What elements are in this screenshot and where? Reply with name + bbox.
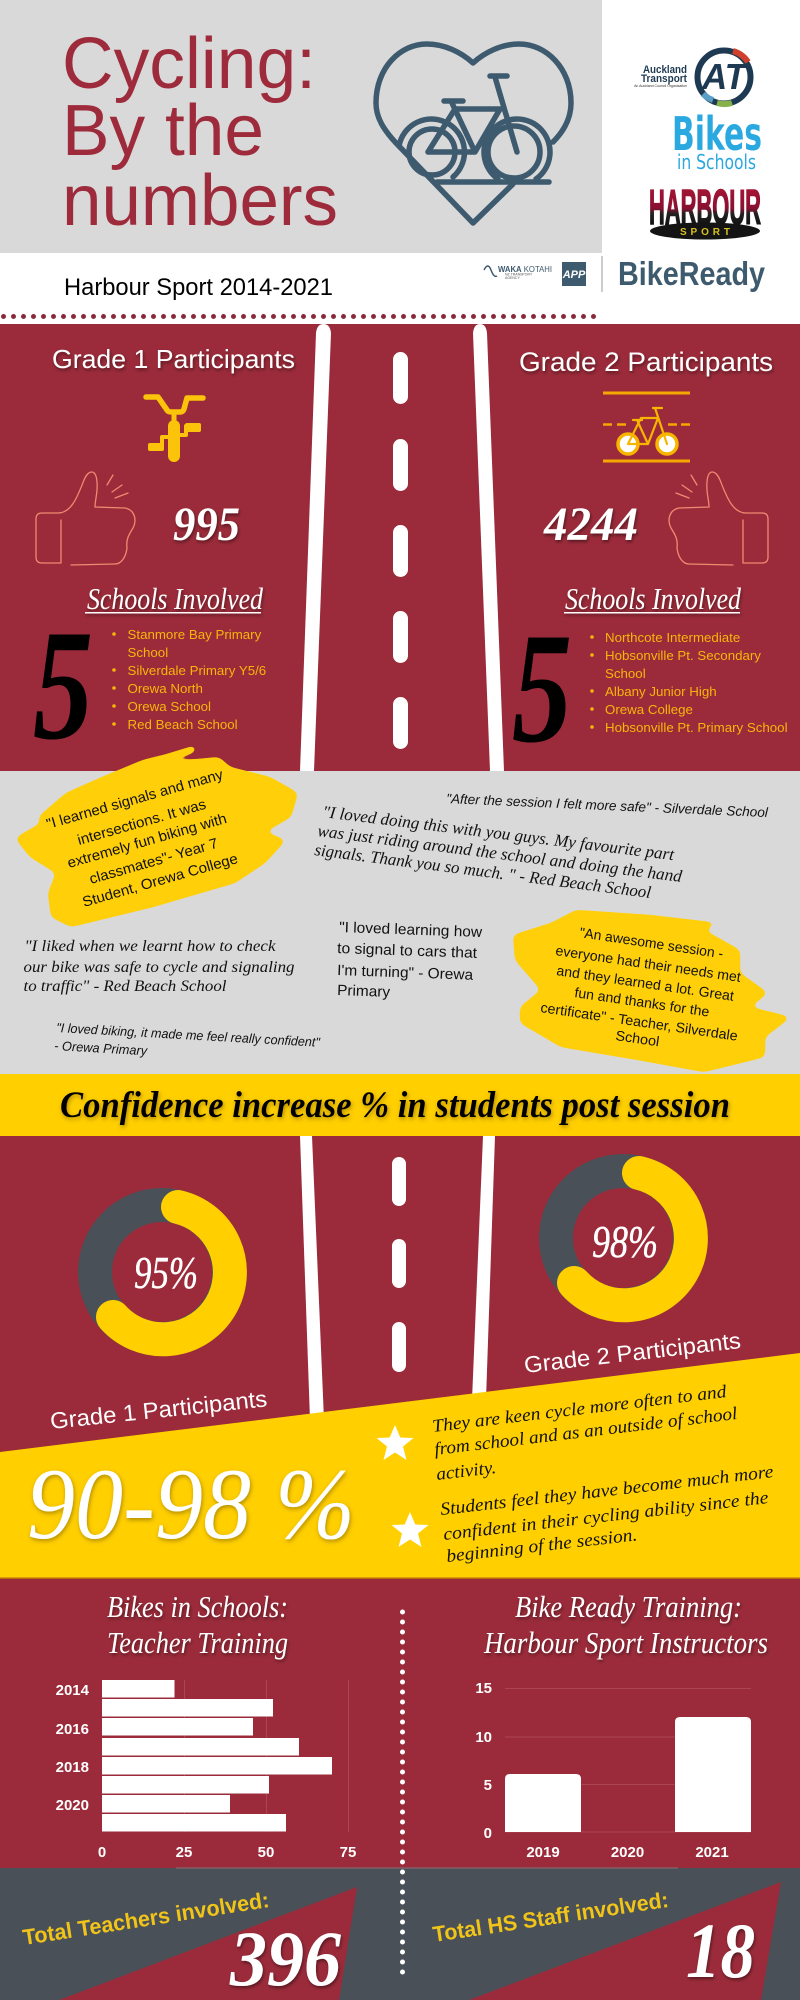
label: total staff: Total HS Staff involved: xyxy=(431,1887,670,1947)
logo: Waka Kotahi xyxy=(484,262,586,286)
quote: teacher silverdale: everyone had their needs met xyxy=(555,942,742,985)
label: 98%: 98% xyxy=(592,1217,658,1267)
bar chart: staff by year: 0 xyxy=(484,1825,492,1842)
logo: Harbour Sport: SPORT xyxy=(680,227,730,238)
panel: participants road xyxy=(0,324,800,776)
quote: teacher silverdale: "An awesome session - xyxy=(579,924,725,961)
slanted yellow band xyxy=(0,1353,800,1580)
quote: year 7 student xyxy=(45,767,240,911)
list: grade 2 schools: Hobsonville Pt. Secondary xyxy=(605,648,761,663)
quote: orewa signal xyxy=(337,919,483,1001)
number: grade 2 participants: 4244 xyxy=(543,498,638,551)
quote: teacher silverdale: fun and thanks for the xyxy=(574,984,711,1020)
bar chart: teachers by year: 2016 xyxy=(56,1721,89,1738)
logo: BikeReady: BikeReady xyxy=(618,255,766,292)
title xyxy=(62,24,338,241)
panel: confidence banner xyxy=(0,1074,800,1136)
panel: header xyxy=(0,0,800,324)
heading: teacher training: Teacher Training xyxy=(107,1625,288,1660)
title: By the xyxy=(62,91,264,171)
brush: left quote xyxy=(15,745,298,927)
list: grade 1 schools: Orewa School xyxy=(128,699,211,714)
number: 396: 396 xyxy=(229,1915,341,2000)
logo: Auckland Transport xyxy=(634,50,750,104)
logo: Waka Kotahi: AGENCY xyxy=(505,276,520,280)
donut: grade 1 95% xyxy=(95,1205,230,1339)
quote: red beach hand signals: was just riding around the school and doing the hand xyxy=(316,821,683,886)
quote: silverdale safe: "After the session I felt more safe" - Silverdale School xyxy=(446,791,769,820)
heading: teacher training: Bikes in Schools: xyxy=(107,1589,288,1624)
quote: orewa signal: I'm turning" - Orewa xyxy=(337,962,474,984)
heading: confidence: Confidence increase % in students post session xyxy=(60,1085,730,1126)
logo: Auckland Transport: Transport xyxy=(641,73,687,85)
logo: Auckland Transport: An Auckland Council Organisation xyxy=(634,84,687,88)
heading: schools involved right: Schools Involved xyxy=(565,581,741,616)
panel: training charts xyxy=(0,1579,800,1868)
text: feel confident: Students feel they have become much more xyxy=(439,1461,774,1519)
list: grade 2 schools: School xyxy=(605,666,646,681)
label: 95%: 95% xyxy=(134,1248,198,1298)
quote: orewa signal: Primary xyxy=(337,982,391,1001)
bar chart: teachers by year: 25 xyxy=(176,1844,192,1861)
quote: year 7 student: Student, Orewa College xyxy=(81,851,240,911)
road edge lines xyxy=(300,1136,495,1420)
heading: grade 2: Grade 2 Participants xyxy=(519,347,773,377)
text: keen cycle: activity. xyxy=(435,1457,497,1484)
bar chart: staff by year: 2019 xyxy=(526,1844,560,1861)
icon: bicycle on lane xyxy=(603,392,690,462)
triangle: staff xyxy=(469,1882,781,2000)
list: grade 2 schools xyxy=(590,630,788,735)
list: grade 2 schools: Albany Junior High xyxy=(605,684,717,699)
label: grade 2 participants: Grade 2 Participants xyxy=(523,1327,742,1378)
list: grade 1 schools xyxy=(112,627,266,732)
list: grade 1 schools: Silverdale Primary Y5/6 xyxy=(128,663,266,678)
quote: red beach bike check: "I liked when we learnt how to check xyxy=(24,938,276,955)
number: 90-98%: 90-98 % xyxy=(27,1448,355,1561)
bar chart: teachers by year: 50 xyxy=(258,1844,274,1861)
logo: Bikes in Schools xyxy=(672,107,762,174)
logo: Auckland Transport: Auckland xyxy=(643,64,687,76)
panel: totals xyxy=(0,1868,800,2000)
quote: orewa confident: "I loved biking, it made me feel really confident" xyxy=(56,1020,322,1050)
text: keen cycle xyxy=(431,1381,738,1484)
logo: Waka Kotahi: WAKA KOTAHI xyxy=(498,265,552,274)
quote: red beach hand signals: "I loved doing this with you guys. My favourite part xyxy=(322,802,676,864)
list: grade 1 schools: School xyxy=(128,645,168,660)
icon: thumbs up left xyxy=(36,472,135,565)
road edge lines xyxy=(300,324,504,771)
title: Cycling: xyxy=(62,24,316,104)
road centre dashes xyxy=(392,1157,406,1372)
icon: heart with bicycle xyxy=(376,44,571,223)
quote: year 7 student: intersections. It was xyxy=(76,797,208,849)
icon: thumbs up right xyxy=(669,472,768,565)
quote: year 7 student: extremely fun biking with xyxy=(66,811,229,872)
quote: red beach hand signals: signals. Thank you so much. " - Red Beach School xyxy=(313,840,652,902)
text: feel confident: confident in their cycling ability since the xyxy=(442,1487,769,1544)
bar chart: staff by year: 10 xyxy=(475,1729,492,1746)
text: feel confident: beginning of the session. xyxy=(445,1524,638,1566)
number: five schools left: 5 xyxy=(33,598,93,773)
quote: red beach hand signals xyxy=(313,802,683,902)
number: grade 1 participants: 995 xyxy=(173,498,240,551)
bar chart: staff by year: 15 xyxy=(475,1680,492,1697)
quote: year 7 student: "I learned signals and many xyxy=(45,767,226,833)
quote: teacher silverdale xyxy=(540,924,742,1049)
icon: star 1 xyxy=(376,1425,414,1460)
title: numbers xyxy=(62,161,338,241)
bar chart: teachers by year: 75 xyxy=(340,1844,356,1861)
bar chart: teachers by year: 2020 xyxy=(56,1797,89,1814)
quote: year 7 student: classmates"- Year 7 xyxy=(88,836,220,888)
logo: Waka Kotahi: NZ TRANSPORT xyxy=(505,272,533,276)
list: grade 1 schools: Orewa North xyxy=(128,681,203,696)
panel: confidence results xyxy=(0,1136,800,1580)
list: grade 2 schools: Hobsonville Pt. Primary School xyxy=(605,720,788,735)
quote: red beach bike check: our bike was safe to cycle and signaling xyxy=(24,959,294,976)
bar chart: staff by year: 5 xyxy=(484,1777,492,1794)
quote: orewa confident: - Orewa Primary xyxy=(54,1038,149,1058)
subtitle: Harbour Sport 2014-2021 xyxy=(64,274,333,301)
heading: instructors xyxy=(483,1589,768,1660)
panel: quotes xyxy=(0,745,800,1074)
number: 18: 18 xyxy=(686,1907,755,1994)
number: five schools right: 5 xyxy=(512,601,572,776)
quote: teacher silverdale: School xyxy=(615,1027,660,1049)
logo: Waka Kotahi: APP xyxy=(562,269,586,281)
heading: schools involved left: Schools Involved xyxy=(87,581,263,616)
quote: red beach bike check xyxy=(24,938,294,995)
logo: Bikes in Schools: in Schools xyxy=(677,150,756,174)
bar chart: staff by year xyxy=(475,1680,751,1861)
icon: star 2 xyxy=(392,1512,428,1547)
heading: teacher training xyxy=(107,1589,288,1660)
bar chart: teachers by year: 0 xyxy=(98,1844,106,1861)
bar chart: teachers by year: 2018 xyxy=(56,1759,89,1776)
label: grade 1 participants: Grade 1 Participants xyxy=(49,1385,268,1434)
text: keen cycle: They are keen cycle more often to and xyxy=(431,1381,728,1436)
bar chart: teachers by year xyxy=(56,1680,356,1861)
text: feel confident xyxy=(439,1461,774,1566)
bar chart: staff by year: 2021 xyxy=(695,1844,729,1861)
heading: grade 1: Grade 1 Participants xyxy=(52,344,295,374)
donut: grade 2 98% xyxy=(556,1171,691,1305)
logo: Harbour Sport xyxy=(649,181,761,240)
brush: right quote xyxy=(513,910,791,1072)
triangle: teachers xyxy=(59,1887,357,2000)
label: total teachers: Total Teachers involved: xyxy=(21,1887,271,1950)
logo: Auckland Transport: AT xyxy=(701,56,749,97)
bar chart: teachers by year: 2014 xyxy=(56,1682,90,1699)
list: grade 1 schools: Red Beach School xyxy=(128,717,238,732)
list: grade 2 schools: Northcote Intermediate xyxy=(605,630,740,645)
text: keen cycle: from school and as an outside of school xyxy=(433,1403,738,1459)
heading: instructors: Bike Ready Training: xyxy=(515,1589,742,1624)
quote: red beach bike check: to traffic" - Red Beach School xyxy=(24,978,227,995)
bar chart: staff by year: 2020 xyxy=(611,1844,644,1861)
list: grade 1 schools: Stanmore Bay Primary xyxy=(128,627,262,642)
quote: orewa signal: to signal to cars that xyxy=(337,940,478,962)
quote: orewa signal: "I loved learning how xyxy=(339,919,483,941)
quote: teacher silverdale: and they learned a lot. Great xyxy=(556,962,735,1004)
list: grade 2 schools: Orewa College xyxy=(605,702,693,717)
road centre dashes xyxy=(393,352,408,749)
quote: teacher silverdale: certificate" - Teacher, Silverdale xyxy=(540,999,739,1044)
icon: bicycle front view xyxy=(146,397,203,462)
